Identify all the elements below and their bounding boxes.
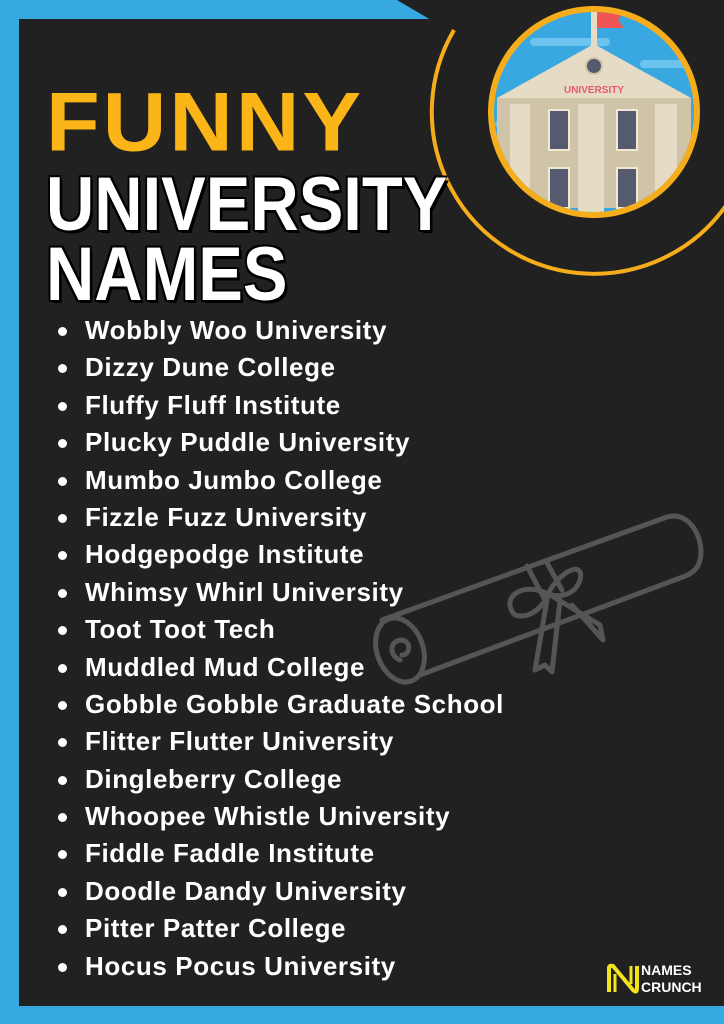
list of names: Mumbo Jumbo College bbox=[85, 465, 382, 495]
icon: diploma scroll bbox=[367, 516, 701, 689]
title: NAMES: NAMES bbox=[46, 232, 288, 317]
emblem: university building: UNIVERSITY bbox=[564, 85, 624, 96]
decorations svg bbox=[373, 6, 724, 685]
list of names: Dingleberry College bbox=[85, 764, 342, 794]
list of names: Fiddle Faddle Institute bbox=[85, 838, 375, 868]
list of names: Flitter Flutter University bbox=[85, 726, 394, 756]
logo text: NAMES bbox=[641, 962, 692, 978]
list of names: Dizzy Dune College bbox=[85, 352, 336, 382]
list of names: Hodgepodge Institute bbox=[85, 539, 364, 569]
logo text bbox=[641, 962, 702, 995]
list of names: Hocus Pocus University bbox=[85, 951, 396, 981]
list of names: Gobble Gobble Graduate School bbox=[85, 689, 504, 719]
list of names: Pitter Patter College bbox=[85, 913, 346, 943]
outer arc bbox=[432, 30, 724, 274]
list of names bbox=[58, 315, 504, 981]
icon: N logo bbox=[607, 964, 639, 994]
list of names: Whimsy Whirl University bbox=[85, 577, 404, 607]
title: FUNNY: FUNNY bbox=[46, 74, 364, 168]
list of names: Muddled Mud College bbox=[85, 652, 365, 682]
logo: Names Crunch bbox=[607, 962, 702, 995]
list of names: Fizzle Fuzz University bbox=[85, 502, 367, 532]
emblem: university building bbox=[488, 6, 700, 218]
list of names: Whoopee Whistle University bbox=[85, 801, 450, 831]
list of names: Fluffy Fluff Institute bbox=[85, 390, 341, 420]
title bbox=[46, 74, 449, 317]
top right dark corner bbox=[397, 0, 724, 19]
list of names: Toot Toot Tech bbox=[85, 614, 275, 644]
list of names: Wobbly Woo University bbox=[85, 315, 387, 345]
list of names: Plucky Puddle University bbox=[85, 427, 410, 457]
title: UNIVERSITY: UNIVERSITY bbox=[46, 162, 447, 247]
logo text: CRUNCH bbox=[641, 979, 702, 995]
list of names: Doodle Dandy University bbox=[85, 876, 407, 906]
